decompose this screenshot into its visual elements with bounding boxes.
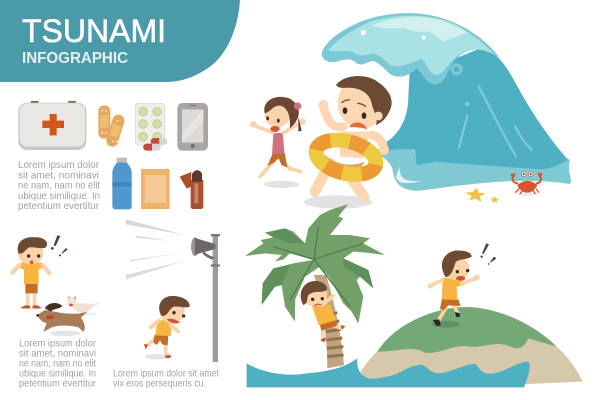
text block: animals: ubique similique. In xyxy=(19,368,96,380)
icon: chocolate bar xyxy=(180,170,203,209)
boy running xyxy=(144,296,190,359)
text block: animals: sit amet, nominavi xyxy=(19,348,96,360)
icon: exclamation marks xyxy=(480,243,496,265)
wave xyxy=(322,13,571,191)
island xyxy=(359,307,583,385)
boy with swim ring xyxy=(304,76,392,209)
text block: kit: ubique similique. In xyxy=(18,191,100,202)
dog xyxy=(36,303,87,336)
sound rays xyxy=(126,219,185,279)
icon: siren horn xyxy=(191,237,215,256)
boy on island xyxy=(428,251,480,326)
text block: animals xyxy=(19,338,97,390)
palm trunk xyxy=(314,275,344,368)
text block: siren: Lorem ipsum dolor sit amet xyxy=(113,368,219,380)
text block: siren xyxy=(113,368,219,390)
icon: pills xyxy=(135,103,167,151)
text block: kit: petentium evertitur xyxy=(18,201,100,212)
text block: animals: Lorem ipsum dolor xyxy=(19,338,97,350)
crab xyxy=(510,172,543,196)
cat xyxy=(67,296,102,316)
text block: siren: vix eros persequeris cu. xyxy=(113,378,206,390)
siren pole xyxy=(203,234,220,362)
subtitle: INFOGRAPHIC xyxy=(22,50,128,67)
panel: animals warning scene xyxy=(12,235,102,336)
panel: tsunami scene xyxy=(250,13,571,209)
text block: animals: petentium evertitur xyxy=(19,378,97,390)
starfish xyxy=(465,188,499,203)
panel: siren scene xyxy=(126,219,220,362)
icon: food packet xyxy=(141,169,170,209)
header banner xyxy=(0,0,240,82)
text block: animals: ne nam, nam no elit xyxy=(19,358,96,370)
boy climbing palm xyxy=(301,281,345,342)
text block: kit: sit amet, nominavi xyxy=(18,170,99,182)
panel: emergency kit xyxy=(18,101,208,209)
text block: kit: Lorem ipsum dolor xyxy=(18,160,100,171)
icon: first aid kit xyxy=(18,101,86,150)
panel: palm island scene xyxy=(245,204,583,387)
icon: bandages xyxy=(98,105,126,148)
title: TSUNAMI xyxy=(22,13,166,49)
icon: water bottle xyxy=(112,158,132,209)
icon: exclamation marks xyxy=(51,235,68,256)
palm leaves xyxy=(245,204,385,323)
boy standing xyxy=(12,237,49,310)
text block: kit: ne nam, nam no elit xyxy=(18,180,100,192)
girl running xyxy=(250,97,306,188)
water xyxy=(247,358,530,387)
text block: kit xyxy=(18,160,100,212)
icon: phone xyxy=(177,103,208,151)
